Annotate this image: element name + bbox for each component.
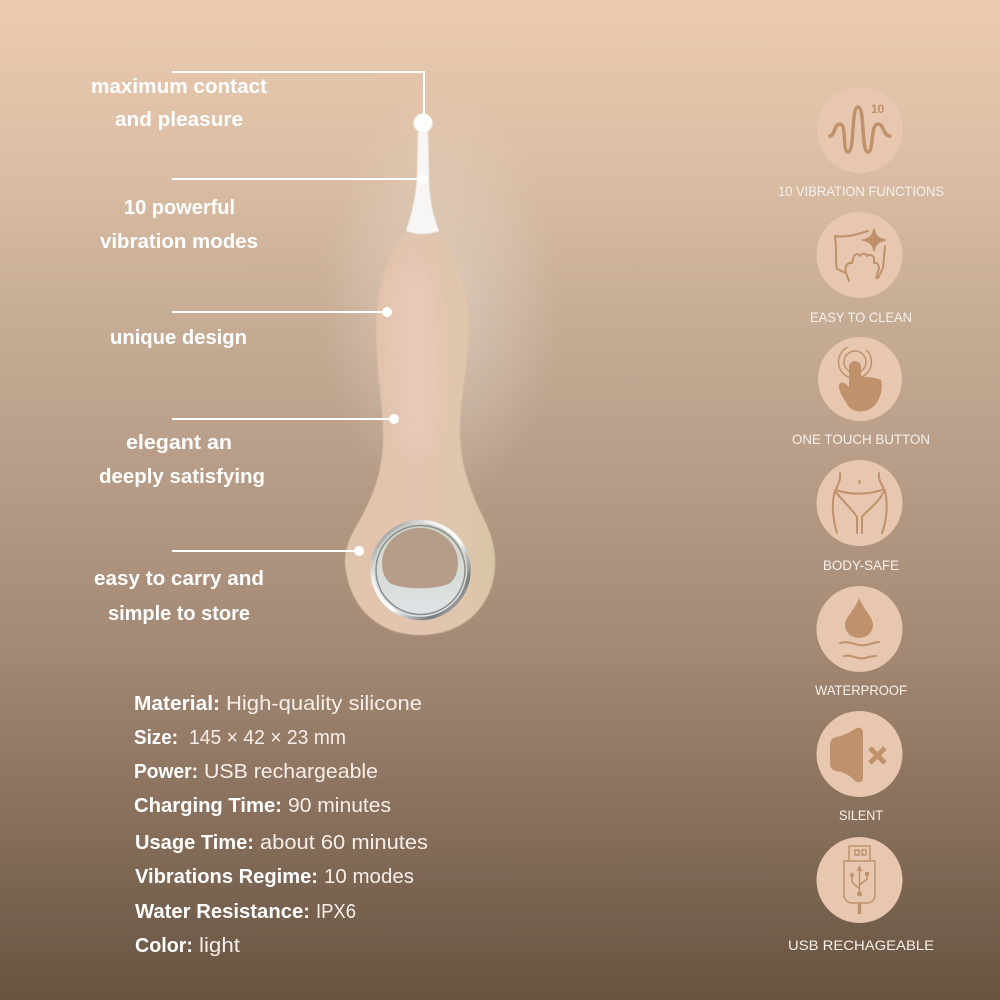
callout: maximum contact bbox=[91, 76, 267, 131]
specifications list: about 60 minutes bbox=[260, 832, 428, 854]
device body bbox=[345, 233, 495, 635]
callout: easy to carry: simple to store bbox=[108, 603, 250, 625]
device highlight bbox=[395, 270, 439, 450]
feature: easy to clean: EASY TO CLEAN bbox=[810, 309, 912, 325]
ring hole bbox=[382, 528, 458, 588]
feature: waterproof bbox=[815, 586, 907, 698]
specifications list: Size: bbox=[134, 727, 178, 749]
device glow bbox=[320, 90, 560, 510]
feature: silent: SILENT bbox=[839, 807, 883, 823]
specifications list: Usage Time: bbox=[135, 832, 254, 854]
callout: easy to carry: easy to carry and bbox=[94, 568, 264, 590]
specifications list: 10 modes bbox=[324, 866, 414, 888]
feature: easy to clean bbox=[810, 212, 912, 325]
callout: vibration modes: vibration modes bbox=[100, 231, 258, 253]
feature: body-safe bbox=[816, 460, 902, 573]
feature: 10 vibration functions: 10 bbox=[871, 102, 885, 116]
specifications list: Material: bbox=[134, 693, 220, 715]
callout lines and dots bbox=[172, 72, 428, 556]
specifications list: Charging Time: bbox=[134, 795, 282, 817]
feature: usb rechargeable: USB RECHAGEABLE bbox=[788, 937, 934, 953]
device tip bbox=[406, 132, 439, 234]
feature: 10 vibration functions bbox=[778, 87, 944, 199]
specifications list: Water Resistance: bbox=[135, 901, 310, 923]
callout: vibration modes: 10 powerful bbox=[124, 197, 235, 219]
feature: one touch button: ONE TOUCH BUTTON bbox=[792, 431, 930, 447]
specifications list bbox=[134, 693, 428, 957]
callout: maximum contact: and pleasure bbox=[115, 109, 243, 131]
specifications list: 145 × 42 × 23 mm bbox=[189, 727, 346, 749]
callout: vibration modes bbox=[100, 197, 258, 253]
specifications list: IPX6 bbox=[316, 901, 356, 923]
specifications list: light bbox=[199, 935, 240, 957]
specifications list: USB rechargeable bbox=[204, 761, 378, 783]
callout: elegant: deeply satisfying bbox=[99, 466, 265, 488]
specifications list: Vibrations Regime: bbox=[135, 866, 318, 888]
callout: elegant bbox=[99, 432, 265, 488]
callout: elegant: elegant an bbox=[126, 432, 232, 454]
product: device bbox=[345, 114, 495, 635]
feature: silent bbox=[816, 711, 902, 823]
feature: one touch button bbox=[792, 337, 930, 447]
device tip ball bbox=[414, 114, 432, 132]
specifications list: 90 minutes bbox=[288, 795, 391, 817]
callout: easy to carry bbox=[94, 568, 264, 625]
specifications list: Color: bbox=[135, 935, 193, 957]
feature: 10 vibration functions: 10 VIBRATION FUNCTIONS bbox=[778, 183, 944, 199]
callout: unique design: unique design bbox=[110, 327, 247, 349]
specifications list: High-quality silicone bbox=[226, 693, 422, 715]
feature: waterproof: WATERPROOF bbox=[815, 682, 907, 698]
specifications list: Power: bbox=[134, 761, 198, 783]
callout: maximum contact: maximum contact bbox=[91, 76, 267, 98]
device ring bbox=[372, 522, 469, 618]
feature: usb rechargeable bbox=[788, 837, 934, 953]
feature: body-safe: BODY-SAFE bbox=[823, 557, 899, 573]
